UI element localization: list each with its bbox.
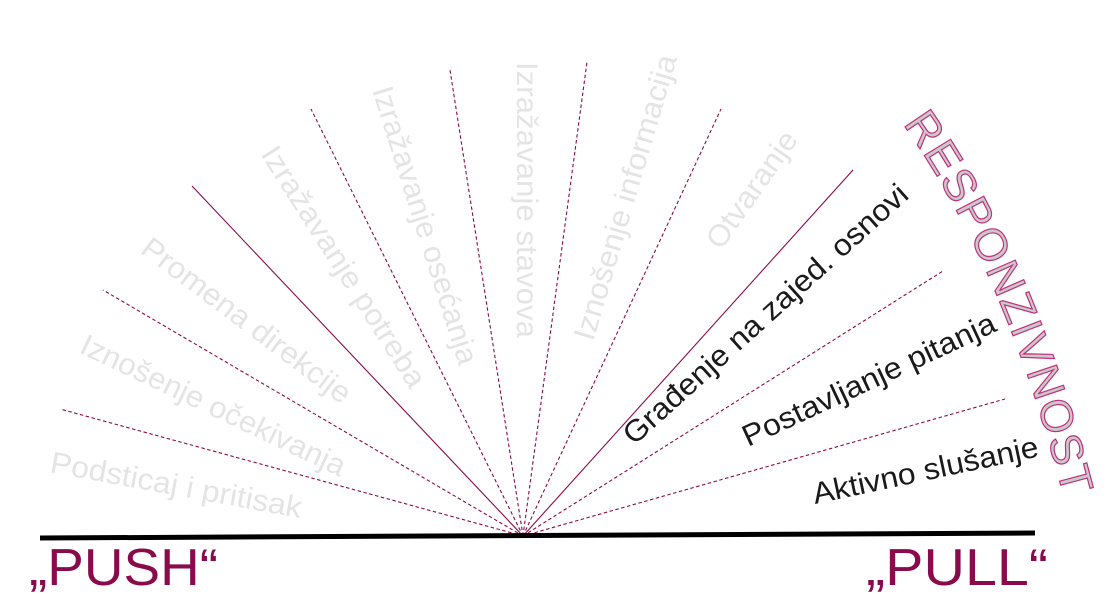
curved title: RESPONZIVNOST: RESPONZIVNOST — [904, 108, 1094, 490]
baseline axis — [40, 533, 1035, 538]
label: Podsticaj i pritisak: Podsticaj i pritisak — [48, 446, 306, 525]
label: Promena direkcije: Promena direkcije — [135, 231, 358, 410]
dashed and solid ray lines — [60, 62, 1005, 536]
label: Aktivno slušanje: Aktivno slušanje — [810, 431, 1041, 511]
label: PULL: „PULL“ — [866, 539, 1048, 597]
label: PUSH: „PUSH“ — [29, 539, 218, 597]
label: Građenje na zajed. osnovi: Građenje na zajed. osnovi — [617, 178, 915, 451]
label: Iznošenje informacija: Iznošenje informacija — [568, 50, 684, 344]
label: Postavljanje pitanja: Postavljanje pitanja — [737, 307, 1001, 453]
label: Izražavanje potreba: Izražavanje potreba — [254, 140, 433, 394]
label: Izražavanje osećanja: Izražavanje osećanja — [365, 82, 484, 369]
label: Iznošenje očekivanja: Iznošenje očekivanja — [75, 329, 351, 483]
label: Izražavanje stavova: Izražavanje stavova — [510, 62, 543, 338]
label: Otvaranje: Otvaranje — [700, 125, 805, 255]
